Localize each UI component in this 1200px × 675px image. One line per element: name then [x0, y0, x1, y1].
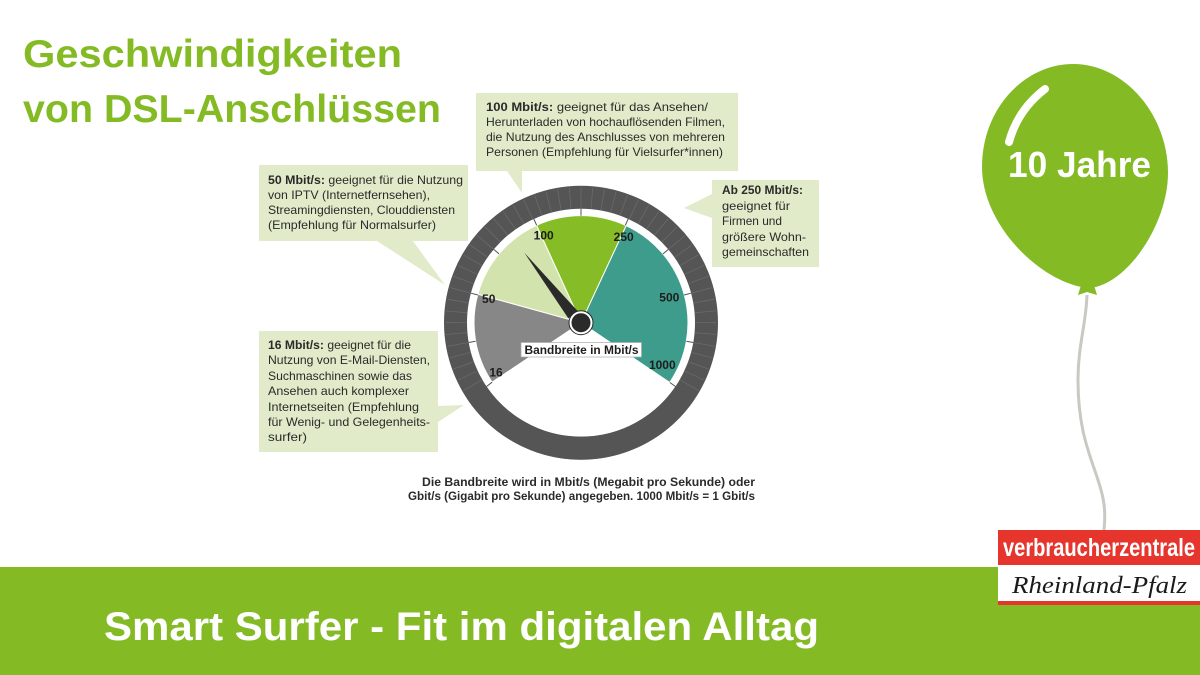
needle	[524, 253, 578, 318]
scale labels: 250	[614, 230, 634, 244]
callout: 16 Mbit/s: für Wenig- und Gelegenheits-	[268, 415, 430, 429]
balloon knot	[1078, 285, 1097, 295]
title: Geschwindigkeiten	[23, 33, 402, 76]
callout: 100 Mbit/s	[476, 93, 738, 193]
speedometer gauge	[456, 197, 706, 448]
footer text: Smart Surfer - Fit im digitalen Alltag	[104, 605, 819, 649]
callout: ab 250 Mbit/s: geeignet für	[722, 199, 790, 213]
callout: 100 Mbit/s: Herunterladen von hochauflösenden Filmen,	[486, 115, 725, 129]
balloon highlight	[1009, 89, 1045, 142]
callout: 16 Mbit/s: Suchmaschinen sowie das	[268, 369, 412, 383]
bandwidth label: Bandbreite in Mbit/s	[524, 345, 638, 357]
logo: Rheinland-Pfalz	[1011, 573, 1188, 599]
scale labels: 1000	[649, 358, 676, 372]
title	[23, 33, 441, 131]
callout: 50 Mbit/s	[259, 165, 468, 285]
callout: ab 250 Mbit/s: größere Wohn-	[722, 230, 806, 244]
logo	[998, 530, 1200, 605]
scale labels: 500	[659, 290, 680, 304]
sector 16 Mbit/s	[474, 294, 581, 382]
callout: 16 Mbit/s: 16 Mbit/s: geeignet für die	[268, 338, 411, 352]
callout: 50 Mbit/s: von IPTV (Internetfernsehen),	[268, 188, 430, 202]
callout: 16 Mbit/s: Ansehen auch komplexer	[268, 384, 409, 398]
callout: ab 250 Mbit/s	[684, 180, 819, 267]
footnote: Gbit/s (Gigabit pro Sekunde) angegeben. 1000 Mbit/s = 1 Gbit/s	[408, 491, 755, 503]
callout: 100 Mbit/s: die Nutzung des Anschlusses von mehreren	[486, 130, 725, 144]
balloon text: 10 Jahre	[1008, 144, 1151, 185]
callout: ab 250 Mbit/s: gemeinschaften	[722, 245, 809, 259]
balloon string	[1078, 295, 1105, 530]
callout: 16 Mbit/s: Internetseiten (Empfehlung	[268, 400, 419, 414]
gauge outer ring	[456, 197, 706, 448]
callout: ab 250 Mbit/s: Ab 250 Mbit/s:	[722, 183, 803, 197]
needle hub	[569, 311, 593, 335]
footer band	[0, 567, 1200, 675]
callout: ab 250 Mbit/s: Firmen und	[722, 214, 782, 228]
sector 250+ Mbit/s	[581, 226, 688, 382]
footnote	[408, 477, 756, 503]
scale labels: 50	[482, 292, 496, 306]
title: von DSL-Anschlüssen	[23, 88, 441, 131]
scale labels	[482, 228, 680, 380]
callout: 16 Mbit/s: surfer)	[268, 430, 307, 444]
callout: 16 Mbit/s: Nutzung von E-Mail-Diensten,	[268, 353, 430, 367]
callout: 100 Mbit/s: Personen (Empfehlung für Vielsurfer*innen)	[486, 145, 723, 159]
sector 50 Mbit/s	[478, 225, 581, 323]
callout: 100 Mbit/s: 100 Mbit/s: geeignet für das Ansehen/	[486, 100, 709, 114]
callout: 50 Mbit/s: (Empfehlung für Normalsurfer)	[268, 218, 436, 232]
callout: 50 Mbit/s: 50 Mbit/s: geeignet für die Nutzung	[268, 173, 463, 187]
sector 100 Mbit/s	[537, 216, 626, 323]
scale labels: 16	[489, 366, 503, 380]
scale ticks	[469, 209, 693, 386]
callout: 16 Mbit/s	[259, 331, 464, 452]
callout: 50 Mbit/s: Streamingdiensten, Clouddiensten	[268, 203, 455, 217]
footnote: Die Bandbreite wird in Mbit/s (Megabit pro Sekunde) oder	[422, 477, 756, 489]
balloon	[982, 64, 1168, 295]
scale labels: 100	[534, 228, 554, 242]
